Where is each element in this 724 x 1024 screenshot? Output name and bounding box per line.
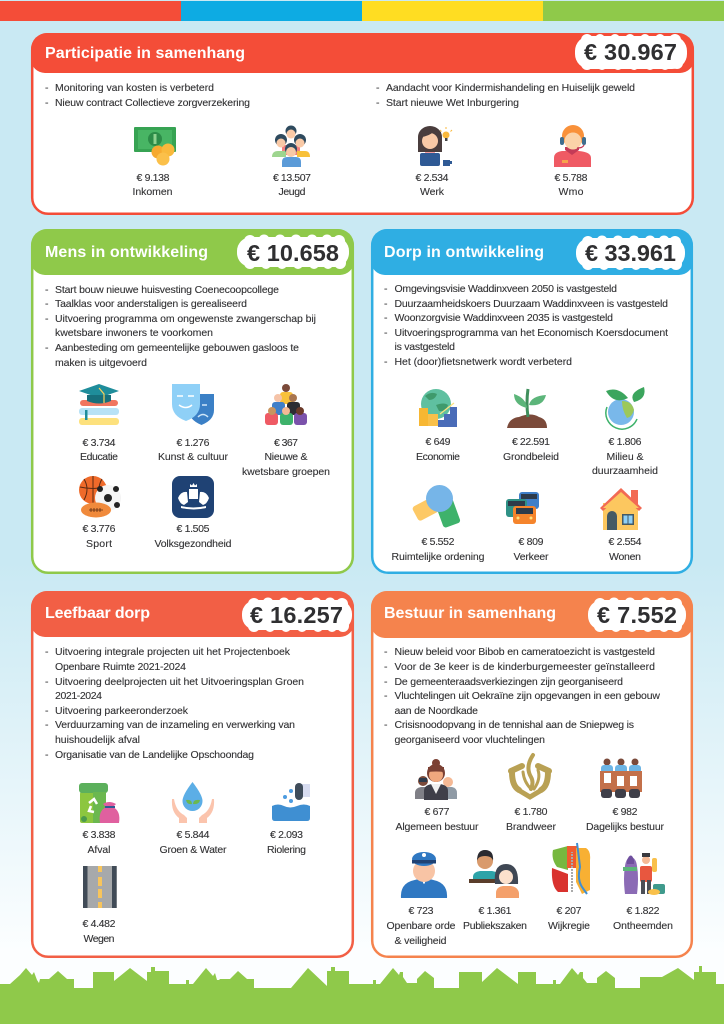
bullet list: -	[45, 298, 49, 310]
item: Wmo	[554, 125, 591, 198]
bullet list: -	[384, 719, 388, 731]
item: Dagelijks bestuur: € 982	[612, 806, 638, 818]
icon: group of youngsters	[272, 126, 310, 167]
item: Milieu & duurzaamheid: € 1.806	[608, 436, 642, 448]
bullet list: -	[384, 283, 388, 295]
item: Educatie	[79, 384, 119, 463]
price badge	[237, 234, 349, 269]
bullet list: Crisisnoodopvang in de tennishal aan de Sniepweg is	[394, 719, 634, 731]
item: Publiekszaken: € 1.361	[478, 905, 512, 917]
bullet list: Uitvoering parkeeronderzoek	[55, 705, 189, 717]
item: Afval	[79, 783, 119, 856]
bullet list right: Aandacht voor Kindermishandeling en Huiselijk geweld	[386, 82, 635, 94]
item: Ontheemden: Ontheemden	[613, 920, 673, 932]
item: Ruimtelijke ordening: Ruimtelijke ordening	[392, 551, 485, 563]
heading: Dorp in ontwikkeling	[384, 244, 544, 261]
item: Dagelijks bestuur: Dagelijks bestuur	[586, 821, 664, 833]
item: Groen & Water	[160, 782, 227, 856]
bullet list: Uitvoering programma om ongewenste zwangerschap bij	[55, 313, 316, 325]
item: Afval: € 3.838	[82, 829, 116, 841]
item: Jeugd	[272, 126, 311, 198]
icon: water drop and hands	[172, 782, 214, 823]
icon: fire brigade emblem	[511, 755, 549, 797]
bullet list: Verduurzaming van de inzameling en verwerking van	[55, 719, 295, 731]
item: Wijkregie: Wijkregie	[548, 920, 590, 932]
item: Werk: Werk	[420, 186, 445, 198]
bullet list	[45, 284, 316, 369]
bullet list: De gemeenteraadsverkiezingen zijn georganiseerd	[394, 676, 623, 688]
bullet list: -	[45, 749, 49, 761]
bullet list: Uitvoering deelprojecten uit het Uitvoeringsplan Groen	[55, 676, 304, 688]
item: Educatie: € 3.734	[82, 437, 116, 449]
item: Ruimtelijke ordening	[392, 485, 485, 563]
item: Volksgezondheid	[154, 476, 232, 550]
icon: traffic cars	[506, 492, 539, 524]
item: Jeugd: € 13.507	[273, 172, 311, 184]
item: Dagelijks bestuur	[586, 758, 664, 833]
item: Openbare orde & veiligheid: € 723	[408, 905, 434, 917]
item: Inkomen	[132, 127, 176, 198]
item: Afval: Afval	[88, 844, 110, 856]
item: Algemeen bestuur: € 677	[424, 806, 450, 818]
price badge: € 10.658	[247, 240, 339, 266]
item: Werk	[416, 126, 452, 198]
bullet list: -	[384, 298, 388, 310]
item: Ontheemden: € 1.822	[626, 905, 660, 917]
price badge: € 16.257	[250, 602, 343, 628]
icon: banknote and coins	[134, 127, 176, 166]
icon: road	[83, 866, 117, 908]
item: Wonen: Wonen	[609, 551, 641, 563]
item: Kunst & cultuur: Kunst & cultuur	[158, 451, 228, 463]
item: Milieu & duurzaamheid	[592, 387, 658, 477]
item: Nieuwe & kwetsbare groepen: € 367	[274, 437, 298, 449]
panel header	[371, 591, 693, 638]
panel header	[31, 229, 354, 275]
icon: displaced people with luggage	[623, 853, 665, 895]
bullet list: Openbare Ruimte 2021-2024	[55, 661, 186, 673]
bullet list: -	[45, 676, 49, 688]
item: Brandweer: Brandweer	[506, 821, 556, 833]
panel: Mens in ontwikkeling	[31, 229, 354, 573]
item: Sport: € 3.776	[82, 523, 116, 535]
skyline footer	[0, 966, 724, 1024]
item: Economie: Economie	[416, 451, 460, 463]
price badge: € 30.967	[584, 39, 677, 65]
bullet list: -	[45, 646, 49, 658]
bullet list: kwetsbare inwoners te voorkomen	[55, 327, 213, 339]
item: Verkeer	[506, 492, 549, 563]
item: Verkeer: Verkeer	[514, 551, 549, 563]
item: Algemeen bestuur: Algemeen bestuur	[396, 821, 479, 833]
icon: house	[600, 488, 642, 530]
bullet list right	[376, 82, 635, 109]
bullet list: Omgevingsvisie Waddinxveen 2050 is vastgesteld	[394, 283, 617, 295]
item: Milieu & duurzaamheid: Milieu &	[606, 451, 644, 463]
bullet list: Voor de 3e keer is de kinderburgemeester geïnstalleerd	[394, 661, 655, 673]
bullet list: -	[384, 661, 388, 673]
item: Wmo: Wmo	[558, 186, 584, 198]
item: Wonen: € 2.554	[608, 536, 642, 548]
icon: woman at laptop with light bulb	[418, 126, 452, 166]
bullet list: Het (door)fietsnetwerk wordt verbeterd	[394, 356, 572, 368]
icon: sports balls	[79, 476, 121, 518]
item: Openbare orde & veiligheid: & veiligheid	[394, 935, 447, 947]
icon: police officer	[401, 852, 447, 898]
price badge	[575, 34, 687, 70]
bullet list: 2021-2024	[55, 690, 102, 702]
price badge: € 7.552	[597, 602, 677, 628]
item: Grondbeleid: € 22.591	[512, 436, 550, 448]
item: Riolering	[267, 783, 310, 856]
heading: Participatie in samenhang	[45, 45, 245, 62]
item: Kunst & cultuur: € 1.276	[176, 437, 210, 449]
icon: call-centre agent with headset	[554, 125, 591, 167]
item: Ruimtelijke ordening: € 5.552	[422, 536, 455, 548]
panel header	[371, 229, 693, 275]
item: Milieu & duurzaamheid: duurzaamheid	[592, 465, 658, 477]
item: Wijkregie	[548, 843, 590, 932]
panel: Participatie in samenhang	[31, 33, 694, 214]
top colour bar	[0, 1, 724, 21]
bullet list right: -	[376, 82, 380, 94]
item: Economie: € 649	[426, 436, 451, 448]
icon: books and graduation cap	[79, 384, 119, 425]
icon: seedling in soil	[507, 389, 547, 428]
item: Economie	[416, 389, 460, 463]
item: Volksgezondheid: Volksgezondheid	[154, 538, 232, 550]
panel: Leefbaar dorp	[31, 591, 354, 957]
bullet list: Uitvoeringsprogramma van het Economisch Koersdocument	[394, 327, 668, 339]
bullet list: -	[384, 676, 388, 688]
icon: pyramid of people	[265, 384, 307, 425]
bullet list: -	[45, 313, 49, 325]
bullet list: Vluchtelingen uit Oekraïne zijn opgevangen in een gebouw	[394, 690, 660, 702]
item: Brandweer	[506, 755, 556, 833]
heading: Bestuur in samenhang	[384, 605, 556, 622]
bullet list: is vastgesteld	[394, 341, 455, 353]
item: Groen & Water: € 5.844	[176, 829, 210, 841]
bullet list: Taalklas voor anderstaligen is gerealiseerd	[55, 298, 247, 310]
bullet list	[384, 283, 668, 368]
bullet list: Nieuw beleid voor Bibob en cameratoezicht is vastgesteld	[394, 646, 655, 658]
item: Sport	[79, 476, 121, 550]
heading: Leefbaar dorp	[45, 605, 150, 622]
item: Wegen	[82, 866, 117, 945]
item: Publiekszaken	[463, 850, 527, 932]
item: Wonen	[600, 488, 642, 563]
icon: district map	[552, 843, 590, 894]
item: Jeugd: Jeugd	[278, 186, 306, 198]
price badge	[588, 598, 686, 632]
icon: overlapping shapes	[412, 485, 461, 528]
item: Ontheemden	[613, 853, 673, 932]
item: Openbare orde & veiligheid: Openbare orde	[386, 920, 456, 932]
bullet list left: -	[45, 82, 49, 94]
panel header	[31, 33, 694, 73]
icon: board members	[415, 759, 457, 800]
item: Riolering: Riolering	[267, 844, 306, 856]
icon: sewer outlet into water	[272, 783, 310, 821]
bullet list: georganiseerd voor vluchtelingen	[394, 734, 545, 746]
heading: Mens in ontwikkeling	[45, 244, 208, 261]
item: Groen & Water: Groen & Water	[160, 844, 227, 856]
bullet list: Duurzaamheidskoers Duurzaam Waddinxveen is vastgesteld	[394, 298, 668, 310]
icon: recycling bin and bag	[79, 783, 119, 823]
bullet list: -	[45, 705, 49, 717]
icon: theatre masks	[172, 384, 214, 425]
item: Wegen: € 4.482	[82, 918, 116, 930]
item: Verkeer: € 809	[518, 536, 544, 548]
item: Nieuwe & kwetsbare groepen: Nieuwe &	[264, 451, 308, 463]
item: Grondbeleid: Grondbeleid	[503, 451, 559, 463]
bullet list	[45, 646, 304, 761]
item: Werk: € 2.534	[416, 172, 449, 184]
bullet list left: Monitoring van kosten is verbeterd	[55, 82, 214, 94]
bullet list: -	[45, 719, 49, 731]
item: Wijkregie: € 207	[556, 905, 582, 917]
item: Educatie: Educatie	[80, 451, 118, 463]
price badge	[242, 598, 352, 632]
bullet list: Aanbesteding om gemeentelijke gebouwen gasloos te	[55, 342, 299, 354]
bullet list: -	[384, 356, 388, 368]
item: Wegen: Wegen	[84, 933, 115, 945]
bullet list: aan de Noordkade	[394, 705, 478, 717]
bullet list left: -	[45, 97, 49, 109]
panel header	[31, 591, 354, 637]
item: Inkomen: € 9.138	[136, 172, 170, 184]
panel: Dorp in ontwikkeling	[371, 229, 693, 573]
item: Publiekszaken: Publiekszaken	[463, 920, 527, 932]
bullet list: huishoudelijk afval	[55, 734, 140, 746]
item: Sport: Sport	[86, 538, 112, 550]
item: Inkomen: Inkomen	[132, 186, 173, 198]
price badge: € 33.961	[585, 240, 676, 266]
icon: counter service	[469, 850, 519, 898]
bullet list: Uitvoering integrale projecten uit het Projectenboek	[55, 646, 291, 658]
bullet list left: Nieuw contract Collectieve zorgverzekering	[55, 97, 250, 109]
item: Volksgezondheid: € 1.505	[176, 523, 210, 535]
item: Grondbeleid	[503, 389, 559, 463]
bullet list: Woonzorgvisie Waddinxveen 2035 is vastgesteld	[394, 312, 613, 324]
bullet list: -	[384, 327, 388, 339]
bullet list	[384, 646, 660, 746]
item: Kunst & cultuur	[158, 384, 228, 463]
bullet list: -	[384, 312, 388, 324]
item: Wmo: € 5.788	[554, 172, 588, 184]
bullet list right: -	[376, 97, 380, 109]
icon: earth with leaves	[606, 387, 645, 429]
item: Nieuwe & kwetsbare groepen: kwetsbare groepen	[242, 466, 330, 478]
bullet list left	[45, 82, 250, 109]
bullet list: -	[45, 284, 49, 296]
icon: globe, coins and rising stairs	[419, 389, 457, 427]
item: Openbare orde & veiligheid	[386, 852, 456, 947]
icon: meeting table	[600, 758, 642, 798]
item: Nieuwe & kwetsbare groepen	[242, 384, 330, 478]
bullet list right: Start nieuwe Wet Inburgering	[386, 97, 519, 109]
bullet list: Start bouw nieuwe huisvesting Coenecoopcollege	[55, 284, 279, 296]
bullet list: -	[45, 342, 49, 354]
panel: Bestuur in samenhang	[371, 591, 693, 957]
bullet list: -	[384, 646, 388, 658]
bullet list: Organisatie van de Landelijke Opschoondag	[55, 749, 254, 761]
item: Brandweer: € 1.780	[514, 806, 548, 818]
item: Riolering: € 2.093	[270, 829, 303, 841]
bullet list: maken is uitgevoerd	[55, 357, 147, 369]
icon: national emblem	[172, 476, 214, 518]
price badge	[576, 236, 685, 270]
bullet list: -	[384, 690, 388, 702]
item: Algemeen bestuur	[396, 759, 479, 833]
